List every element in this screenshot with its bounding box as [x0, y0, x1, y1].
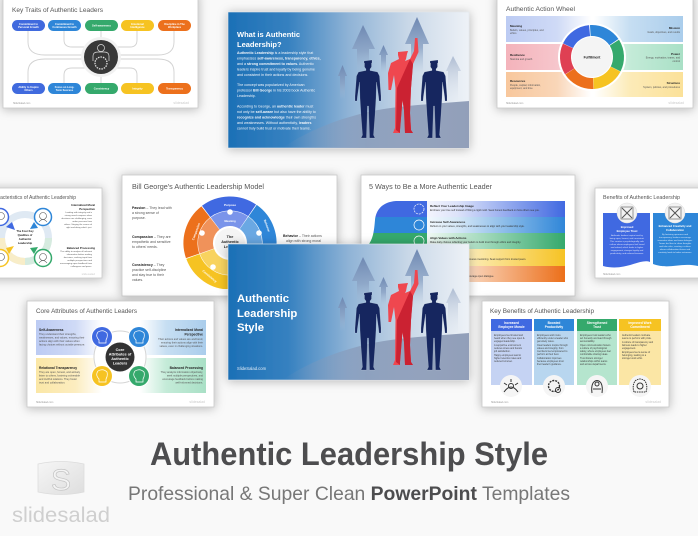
logo: slidesalad: S — [51, 464, 71, 497]
slide: Authentic Action Wheel: equipment, and time — [510, 87, 533, 90]
slide: Key Benefits of Authentic Leadership: heard when they see open & — [494, 337, 525, 340]
slide: Authentic Leadership Style cover — [228, 244, 469, 380]
slide: Key Benefits of Authentic Leadership: Improved Work — [628, 321, 652, 325]
slide: Core Attributes of Authentic Leaders: Self-Awareness — [39, 328, 64, 332]
slide: What is Authentic Leadership? — [228, 12, 469, 148]
slide: Key Benefits of Authentic Leadership: Authentic leaders motivate — [622, 334, 651, 337]
slide: Key Traits of Authentic Leaders: Intelligence — [130, 25, 145, 29]
main title: Authentic Leadership Style — [150, 436, 548, 472]
slide: Key Benefits of Authentic Leadership: belonging, leading to a — [622, 354, 647, 357]
slide: Benefits of Authentic Leadership: Teams feel free to share thoughts — [659, 242, 692, 245]
slide: Key Traits of Authentic Leaders: Continuous Growth — [52, 25, 77, 29]
slide: Bill George's Authentic Leadership Model: Compassion – They are — [132, 235, 171, 239]
slide: Authentic Action Wheel: Energy, motivation, teams, and — [646, 56, 681, 60]
slide: Authentic Action Wheel: Mission — [669, 26, 680, 30]
slide: Characteristics of Authentic Leadership: Internalized Moral — [71, 203, 95, 207]
slide: Key Benefits of Authentic Leadership: SlideSalad.com — [491, 401, 508, 404]
slide: Characteristics of Authentic Leadership: under pressure from — [72, 220, 92, 223]
slide: Core Attributes of Authentic Leaders: Relational Transparency — [39, 366, 77, 370]
slide: Benefits of Authentic Leadership: and valued, which leads to higher — [611, 246, 643, 249]
slide: Key Benefits of Authentic Leadership: accountability. — [580, 340, 595, 343]
slide: Characteristics of Authentic Leadership: colleagues and peers. — [71, 265, 92, 268]
slide: Bill George's Authentic Leadership Model: Consistency – They — [132, 263, 164, 267]
slide: Key Traits of Authentic Leaders: Term Success — [56, 88, 74, 92]
slide: Bill George's Authentic Leadership Model: Meaning — [224, 219, 236, 223]
slide: Key Traits of Authentic Leaders: Discipline in The — [164, 22, 185, 26]
slide: Benefits of Authentic Leadership: Improved — [621, 225, 634, 229]
slide: Bill George's Authentic Leadership Model: to others' needs. — [132, 245, 158, 249]
slide: Bill George's Authentic Leadership Model: Behavior — [263, 219, 271, 233]
slide: Key Benefits of Authentic Leadership: perform at their best. — [537, 353, 559, 356]
slide: 5 Ways to Be a More Authentic Leader: Share your thinking openly and encourage open dialogue. — [430, 275, 494, 278]
slide: Key Benefits of Authentic Leadership: Trust — [593, 325, 602, 329]
slide: Key Traits of Authentic Leaders: Others — [24, 88, 33, 92]
slide: Characteristics of Authentic Leadership — [0, 188, 102, 278]
slide: Bill George's Authentic Leadership Model: a strong sense of — [132, 211, 159, 215]
slide: Authentic Action Wheel: Stamina and growth — [510, 58, 533, 61]
slide: Key Benefits of Authentic Leadership: Employees feel a sense of — [622, 351, 650, 354]
slide: Benefits of Authentic Leadership: SlideSalad.com — [603, 273, 620, 276]
slide: Key Benefits of Authentic Leadership: comfortable sharing ideas. — [580, 353, 608, 356]
slide: Core Attributes of Authentic Leaders: Balanced Processing — [170, 366, 203, 370]
slide: Core Attributes of Authentic Leaders — [27, 301, 214, 407]
slide: Key Traits of Authentic Leaders: slidesalad — [173, 101, 189, 105]
slide: Bill George's Authentic Leadership Model: Purpose — [224, 203, 236, 207]
slide: Key Benefits of Authentic Leadership: Open communication fosters — [580, 344, 611, 347]
slide: 5 Ways to Be a More Authentic Leader: Align Values with Actions — [430, 236, 467, 240]
slide: Key Benefits of Authentic Leadership: Increased — [504, 321, 519, 325]
slide: Core Attributes of Authentic Leaders: actions align with their values when — [39, 339, 80, 343]
slide: Core Attributes of Authentic Leaders: Core Attributes of Authentic Leaders — [36, 308, 137, 315]
slide: Key Traits of Authentic Leaders: Key Traits of Authentic Leaders — [12, 7, 103, 14]
slide: Key Benefits of Authentic Leadership: A supportive environment — [494, 344, 521, 347]
body text: authentic leadership definition: professor Bill George in his 2003 book Authentic — [237, 88, 315, 92]
slide: Key Benefits of Authentic Leadership: Collaboration improves — [537, 357, 562, 360]
slide: Authentic Action Wheel: control — [672, 60, 680, 63]
slide: Bill George's Authentic Leadership Model: Behavior – Their actions — [283, 234, 322, 238]
slide: Benefits of Authentic Leadership: Enhanced Creativity and — [659, 224, 692, 228]
slide: 5 Ways to Be a More Authentic Leader: Reflect on your values, strengths, and weaknesses to align with your leadership style. — [430, 225, 525, 228]
slide: Key Benefits of Authentic Leadership: Employee Morale — [498, 325, 525, 329]
slide: Key Benefits of Authentic Leadership: reduced turnover. — [494, 360, 513, 363]
body text: authentic leadership definition: cannot truly build trust or motivate their teams. — [237, 126, 311, 130]
slide: Key Benefits of Authentic Leadership: relationships within teams — [580, 360, 608, 363]
slide: Bill George's Authentic Leadership Model: Passion – They lead with — [132, 206, 172, 210]
slide: Key Benefits of Authentic Leadership: job satisfaction. — [493, 350, 511, 353]
slide: Key Traits of Authentic Leaders: Commitment to — [19, 22, 38, 26]
slide: Core Attributes of Authentic Leaders: weaknesses, and values, ensuring their — [39, 336, 85, 340]
slide: Key Benefits of Authentic Leadership: members feel empowered to — [537, 350, 568, 353]
slide: Key Benefits of Authentic Leadership: Strengthened — [587, 321, 607, 325]
slide: Characteristics of Authentic Leadership: Balanced Processing — [67, 246, 95, 250]
slide: Characteristics of Authentic Leadership: The ability to analyze all relevant — [60, 250, 92, 253]
body text: authentic leadership definition: recognize and acknowledge their own strengths — [237, 116, 316, 120]
slide: Key Benefits of Authentic Leadership: their leader's guidance. — [537, 363, 562, 366]
slide: Benefits of Authentic Leadership: engagement, stronger loyalty and — [611, 249, 644, 252]
slide: Bill George's Authentic Leadership Model: The — [227, 235, 233, 239]
slide: Core Attributes of Authentic Leaders: Authentic — [111, 357, 129, 361]
slide: Key Traits of Authentic Leaders: Integrity — [132, 86, 143, 90]
slide: Key Benefits of Authentic Leadership: Employees feel trusted and — [494, 334, 524, 337]
slide: Key Benefits of Authentic Leadership: Happy employees lead to — [494, 354, 522, 357]
slide: Core Attributes of Authentic Leaders: ensuring their actions align with their — [161, 340, 203, 344]
slide: Authentic Action Wheel: System, policies, and procedures — [643, 86, 681, 89]
slide: Benefits of Authentic Leadership: productivity, and reduced turnover. — [610, 252, 644, 255]
slide: Core Attributes of Authentic Leaders: slidesalad — [189, 400, 205, 404]
slide: Core Attributes of Authentic Leaders: Internalized Moral — [175, 328, 203, 332]
slide: Authentic Action Wheel: slidesalad — [668, 101, 684, 105]
slide: Benefits of Authentic Leadership: By fostering openness and — [662, 233, 689, 236]
slide: Bill George's Authentic Leadership Model: Compassion — [191, 222, 201, 241]
slide: Key Benefits of Authentic Leadership: values and integrity, from — [537, 347, 564, 350]
slide: 5 Ways to Be a More Authentic Leader: Lead with Transparency — [430, 269, 465, 273]
slide: Key Benefits of Authentic Leadership: reduces stress and boosts — [494, 347, 523, 350]
cover title: Style — [237, 322, 264, 334]
slide: Key Traits of Authentic Leaders: SlideSalad.com — [13, 102, 30, 105]
body text: authentic leadership definition: The concept was popularized by American — [237, 83, 305, 87]
heading: What is Authentic Leadership?: Leadership? — [237, 40, 282, 49]
slide: Key Traits of Authentic Leaders: Emotional — [131, 22, 144, 26]
slide: Characteristics of Authentic Leadership: decisions are challenging, even — [61, 217, 93, 220]
slide: Key Benefits of Authentic Leadership: Key Benefits of Authentic Leadership — [490, 308, 594, 315]
slide: Key Benefits of Authentic Leadership: Employees work more — [537, 334, 561, 337]
slide: Characteristics of Authentic Leadership: slidesalad — [82, 272, 95, 276]
slide: 5 Ways to Be a More Authentic Leader — [361, 175, 575, 296]
slide: Authentic Action Wheel — [497, 0, 693, 108]
slide: Benefits of Authentic Leadership: transparency, leaders encourage — [659, 236, 692, 239]
slide: Core Attributes of Authentic Leaders: Perspective — [184, 332, 203, 336]
slide: Authentic Action Wheel: Structure — [667, 81, 680, 85]
slide: Benefits of Authentic Leadership: Authentic leaders inspire trust by — [611, 234, 644, 237]
slide: Key Benefits of Authentic Leadership: teams to perform with pride. — [622, 337, 652, 340]
slide: Key Benefits of Authentic Leadership: Commitment — [630, 325, 651, 329]
slide: 5 Ways to Be a More Authentic Leader: 5 Ways to Be a More Authentic Leader — [369, 184, 493, 191]
slide: Authentic Action Wheel: Authentic Action Wheel — [506, 6, 575, 13]
slide: Core Attributes of Authentic Leaders: facing choices without outside pressure. — [39, 342, 85, 346]
slide: Core Attributes of Authentic Leaders: values, even in challenging situations. — [159, 344, 203, 348]
slide: Bill George's Authentic Leadership Model: practice self-discipline — [132, 268, 166, 272]
slide: Bill George's Authentic Leadership Model: Authentic — [221, 240, 239, 244]
slide: Bill George's Authentic Leadership Model — [122, 175, 337, 296]
slide: Core Attributes of Authentic Leaders: encourage feedback before making — [162, 377, 204, 381]
slide: Core Attributes of Authentic Leaders: well-informed decisions. — [175, 380, 203, 384]
slide: Bill George's Authentic Leadership Model: purpose. — [132, 216, 146, 220]
slide: Benefits of Authentic Leadership: where collaboration thrives and — [660, 248, 691, 251]
slide: Core Attributes of Authentic Leaders: seek multiple perspectives, and — [167, 374, 204, 378]
slide: Authentic Action Wheel: Meaning — [510, 24, 522, 28]
slide: Key Benefits of Authentic Leadership: fairness leads to higher — [622, 344, 647, 347]
slide: Bill George's Authentic Leadership Model: Bill George's Authentic Leadership Model — [132, 184, 264, 191]
slide: Key Traits of Authentic Leaders: Commitment to — [55, 22, 74, 26]
cover website: SlideSalad.com — [237, 366, 267, 371]
slide: Bill George's Authentic Leadership Model: empathetic and sensitive — [132, 240, 171, 244]
slide: Authentic Action Wheel: Fulfillment — [584, 56, 601, 60]
slide: Core Attributes of Authentic Leaders: Leaders — [113, 362, 127, 366]
slide: Authentic Action Wheel: ethics — [510, 32, 517, 35]
slide: Key Benefits of Authentic Leadership: engaged leadership. — [494, 340, 516, 343]
slide: Key Benefits of Authentic Leadership: a culture of psychological — [580, 347, 607, 350]
slide: Key Benefits of Authentic Leadership: and across departments. — [580, 363, 607, 366]
slide: Key Benefits of Authentic Leadership: slidesalad — [645, 400, 661, 404]
slide: Key Benefits of Authentic Leadership: Clear leaders inspire through — [537, 344, 568, 347]
slide: Characteristics of Authentic Leadership: The Four Key — [16, 229, 34, 233]
slide: Authentic Action Wheel: Beliefs, values, principles, and — [510, 29, 544, 32]
body text: authentic leadership definition: emphasizes self-awareness, transparency, ethics, — [237, 56, 321, 60]
slide: Key Benefits of Authentic Leadership: higher retention rates and — [494, 357, 522, 360]
slide: Characteristics of Authentic Leadership: decisions, seeking input from — [64, 256, 92, 259]
slide: Key Benefits of Authentic Leadership: Productivity — [545, 325, 563, 329]
heading: What is Authentic Leadership?: What is Authentic — [237, 30, 300, 39]
slide: Authentic Action Wheel: People, capital, information, — [510, 84, 541, 87]
slide: Key Benefits of Authentic Leadership: engagement. — [622, 347, 636, 350]
slide: Core Attributes of Authentic Leaders: Attributes of — [109, 352, 132, 356]
slide: Core Attributes of Authentic Leaders: SlideSalad.com — [36, 401, 53, 404]
slide: Characteristics of Authentic Leadership: Perspective — [79, 207, 95, 211]
slide: Core Attributes of Authentic Leaders: and truthful relations. They foster — [39, 377, 77, 381]
illustration: leaders and upward arrows — [282, 17, 469, 148]
slide: Key Benefits of Authentic Leadership: efficiently under a leader who — [537, 337, 569, 340]
slide: Bill George's Authentic Leadership Model: align with strong moral — [286, 239, 321, 243]
slide: Benefits of Authentic Leadership: being open, honest, and consistent. — [610, 237, 645, 240]
slide: Benefits of Authentic Leadership: Benefits of Authentic Leadership — [603, 195, 680, 201]
slide: Characteristics of Authentic Leadership: Leadership — [18, 241, 33, 245]
slide: Key Traits of Authentic Leaders — [3, 0, 198, 108]
slide: Key Traits of Authentic Leaders: Transparency — [166, 86, 183, 90]
body text: authentic leadership definition: and consistent in their actions and decisions. — [237, 73, 308, 77]
slide: Key Benefits of Authentic Leadership: genuinely cares. — [537, 340, 555, 343]
slide: Key Benefits of Authentic Leadership: because employees trust — [537, 360, 564, 363]
body text: authentic leadership definition: According to George, an authentic leader must — [237, 104, 313, 108]
slide: Characteristics of Authentic Leadership: Leading with integrity and a — [65, 211, 93, 214]
slide: Key Traits of Authentic Leaders: Consistency — [94, 86, 110, 90]
slide: Benefits of Authentic Leadership — [595, 188, 698, 278]
body text: authentic leadership definition: leaders inspire trust and loyalty by being genuine — [237, 68, 315, 72]
slide: Benefits of Authentic Leadership: culture where employees feel heard — [610, 243, 645, 246]
slide: Benefits of Authentic Leadership: and take risks, creating a culture — [659, 245, 692, 248]
slide: Key Traits of Authentic Leaders: Self-awareness — [92, 24, 111, 28]
logo: slidesalad: slidesalad — [12, 503, 110, 527]
slide: Authentic Action Wheel: Resilience — [510, 53, 525, 57]
slide: Characteristics of Authentic Leadership: encouraging open feedback from — [60, 262, 92, 265]
slide: Key Traits of Authentic Leaders: Workplace — [168, 25, 182, 29]
slide: Key Traits of Authentic Leaders: Ability to Inspire — [18, 85, 39, 89]
slide: Key Benefits of Authentic Leadership: Trust fosters stronger — [580, 357, 603, 360]
slide: Characteristics of Authentic Leadership: others. Staying the course of — [64, 223, 92, 226]
slide: 5 Ways to Be a More Authentic Leader: Increase Self-Awareness — [430, 220, 466, 224]
slide: Authentic Action Wheel: Power — [671, 52, 681, 56]
cover title: Authentic — [237, 293, 289, 305]
slide: Characteristics of Authentic Leadership: information before making — [67, 253, 93, 256]
body text: authentic leadership definition: Authentic Leadership is a leadership style that — [237, 51, 313, 55]
subtitle: Professional & Super Clean PowerPoint Templates — [128, 483, 570, 505]
slide: Authentic Action Wheel: SlideSalad.com — [506, 102, 523, 105]
body text: authentic leadership definition: Leadership. — [237, 94, 256, 98]
slide: Characteristics of Authentic Leadership: right and doing what's just. — [66, 226, 92, 229]
body text: authentic leadership definition: not only be self-aware but also have the ability to — [237, 110, 316, 114]
slide: 5 Ways to Be a More Authentic Leader: Build Strong Relationships — [430, 252, 469, 256]
illustration: leaders and upward arrows cover — [282, 249, 469, 380]
cover title: Leadership — [237, 308, 297, 320]
slide: Key Benefits of Authentic Leadership: A culture of transparency and — [622, 341, 654, 344]
slide: Benefits of Authentic Leadership: innovative ideas and team dialogue. — [658, 239, 693, 242]
slide: 5 Ways to Be a More Authentic Leader: Make daily choices reflecting your beliefs to build trust through ethics and integrity. — [430, 241, 521, 244]
slide: Core Attributes of Authentic Leaders: listen to others, fostering vulnerable — [39, 374, 81, 378]
slide: Bill George's Authentic Leadership Model: values. — [132, 278, 143, 282]
slide: Core Attributes of Authentic Leaders: Their actions and values are anchored, — [158, 337, 203, 341]
slide: Key Benefits of Authentic Leadership: act honestly and lead through — [580, 337, 612, 340]
slide: Key Traits of Authentic Leaders: Focus on Long- — [55, 85, 74, 89]
slide: Core Attributes of Authentic Leaders: They understand their strengths, — [39, 332, 77, 336]
slide: Benefits of Authentic Leadership: creativity leads to better outcomes. — [658, 251, 692, 254]
slide: Benefits of Authentic Leadership: Collaboration — [666, 228, 684, 232]
slide: Bill George's Authentic Leadership Model: Leader — [224, 245, 237, 249]
slide: Bill George's Authentic Leadership Model: and stay true to their — [132, 273, 165, 277]
slide: 5 Ways to Be a More Authentic Leader: Connect deeply and commit to continuous mentoring. Seek support from trusted peers. — [430, 258, 526, 261]
body text: authentic leadership definition: and a strong commitment to values. Authentic — [237, 62, 314, 66]
slide: Core Attributes of Authentic Leaders: They analyze information objectively, — [161, 370, 203, 374]
slide: Key Benefits of Authentic Leadership — [482, 301, 669, 407]
slide: Characteristics of Authentic Leadership: multiple perspectives and — [67, 259, 93, 262]
slide: Characteristics of Authentic Leadership: Authentic — [19, 237, 32, 241]
slide: Core Attributes of Authentic Leaders: Core — [116, 348, 124, 352]
slide: Benefits of Authentic Leadership: This creates a psychologically safe — [610, 240, 645, 243]
slide: Key Benefits of Authentic Leadership: stronger work ethic. — [622, 357, 643, 360]
slide: Key Traits of Authentic Leaders: Personal Growth — [18, 25, 39, 29]
slide: Benefits of Authentic Leadership: Employee Trust — [617, 229, 637, 233]
body text: authentic leadership definition: and weaknesses. Without authenticity, leaders — [237, 121, 311, 125]
slide: Key Benefits of Authentic Leadership: Boosted — [548, 321, 560, 325]
slide: Core Attributes of Authentic Leaders: They are open, honest, and actively — [39, 370, 81, 374]
slide: Core Attributes of Authentic Leaders: trust and collaboration. — [39, 380, 66, 384]
logo: slidesalad — [12, 462, 110, 527]
slide: Characteristics of Authentic Leadership: strong moral compass when — [65, 214, 93, 217]
slide: Key Benefits of Authentic Leadership: Employees trust leaders who — [580, 334, 611, 337]
slide: Authentic Action Wheel: Resources — [510, 79, 526, 83]
slide: 5 Ways to Be a More Authentic Leader: Embrace your true self instead of fitting a rigid mold. Seek honest feedback on how others see you. — [430, 209, 540, 212]
slide: Bill George's Authentic Leadership Model: Consistency — [202, 269, 218, 284]
slide: 5 Ways to Be a More Authentic Leader: Reflect Your Leadership Image — [430, 204, 474, 208]
slide: Authentic Action Wheel: Goals, objectives, and results — [647, 31, 681, 34]
slide: Key Benefits of Authentic Leadership: safety, where employees feel — [580, 350, 611, 353]
slide: Characteristics of Authentic Leadership: Qualities of — [18, 233, 32, 237]
